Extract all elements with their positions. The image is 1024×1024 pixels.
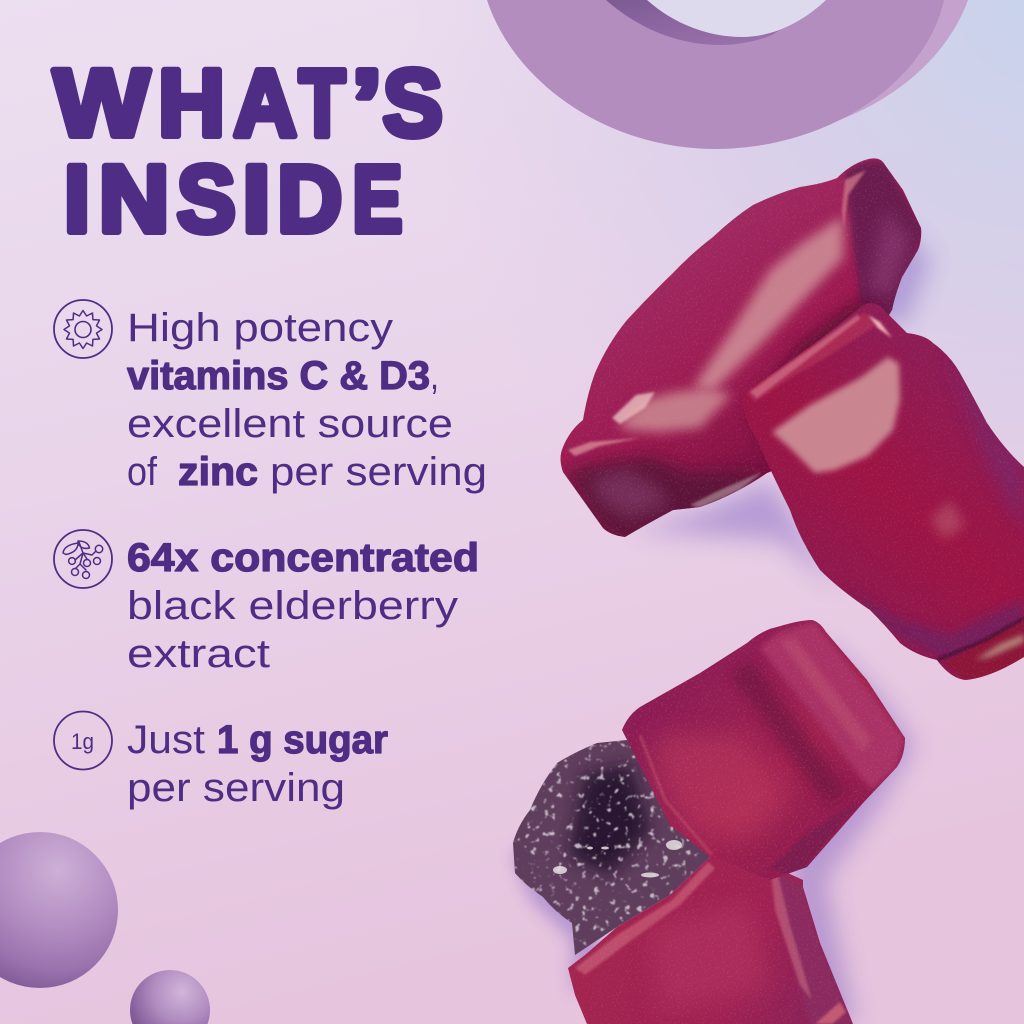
text: vitamins and zinc: High potency [127, 306, 393, 350]
title: WHAT'S INSIDE: S [383, 50, 443, 156]
title: WHAT'S INSIDE [54, 50, 443, 252]
gummy: upper right [740, 300, 1024, 685]
text: vitamins and zinc: , [430, 354, 439, 398]
text: sugar: per serving [127, 766, 345, 810]
decorative large sphere [0, 832, 118, 988]
text: elderberry extract [127, 536, 479, 676]
decorative ring at top [487, 0, 968, 149]
text: vitamins and zinc: excellent source [127, 402, 453, 446]
icon: elderberry sprig in circle [54, 530, 112, 588]
text: elderberry extract: black elderberry [127, 584, 458, 628]
title: WHAT'S INSIDE: I [64, 146, 90, 252]
title: WHAT'S INSIDE: D [277, 146, 342, 252]
gummy shadows [512, 230, 930, 1024]
text: vitamins and zinc: zinc [178, 450, 258, 494]
title: WHAT'S INSIDE: I [242, 146, 270, 252]
text: sugar: Just [127, 718, 205, 762]
text: vitamins and zinc: of [127, 450, 158, 494]
text: sugar [127, 718, 388, 810]
title: WHAT'S INSIDE: H [158, 50, 225, 156]
title: WHAT'S INSIDE: A [234, 50, 297, 156]
gummy: upper left [555, 155, 925, 545]
text: sugar: 1 g sugar [217, 718, 388, 762]
benefit 1: vitamins and zinc [54, 300, 487, 494]
elderberry filling [513, 740, 710, 955]
text: vitamins and zinc: per serving [270, 450, 487, 494]
benefit 2: elderberry extract [54, 530, 479, 676]
icon: 1g in circle: 1g [71, 729, 94, 754]
gummy: bottom broken with filling [505, 618, 910, 1024]
benefit 3: sugar [54, 712, 388, 810]
gummy upper half [622, 620, 905, 880]
title: WHAT'S INSIDE: ’ [352, 50, 382, 156]
title: WHAT'S INSIDE: W [54, 50, 150, 156]
text: elderberry extract: extract [127, 632, 270, 676]
text: vitamins and zinc [127, 306, 487, 494]
decorative small sphere [130, 970, 210, 1024]
title: WHAT'S INSIDE: E [352, 146, 402, 252]
title: WHAT'S INSIDE: T [299, 50, 345, 156]
title: WHAT'S INSIDE: N [99, 146, 169, 252]
gummy lower half [568, 857, 853, 1024]
icon: sun in circle [54, 300, 112, 358]
icon: 1g in circle [54, 712, 112, 770]
text: elderberry extract: 64x concentrated [127, 536, 479, 580]
text: vitamins and zinc: vitamins C & D3 [127, 354, 430, 398]
title: WHAT'S INSIDE: S [177, 146, 236, 252]
